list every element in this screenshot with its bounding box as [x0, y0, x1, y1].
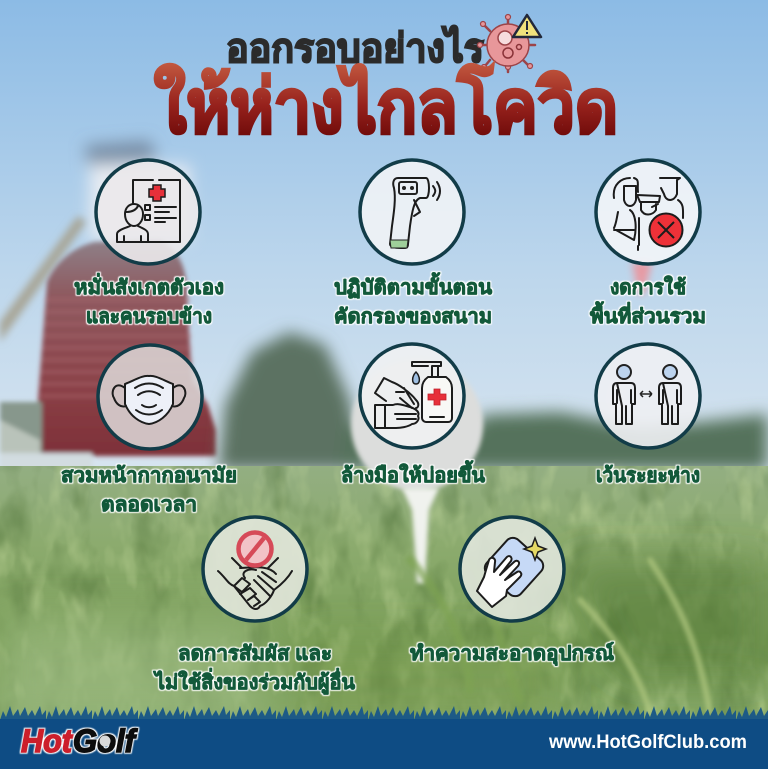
icon: handshake with prohibition sign [203, 517, 307, 621]
icon: hands and sanitizer [360, 344, 464, 448]
title line 2: ให้ห่างไกลโควิด [154, 63, 618, 148]
label: ตลอดเวลา [101, 494, 197, 516]
label: ไม่ใช้สิ่งของร่วมกับผู้อื่น [153, 667, 355, 696]
label [74, 272, 224, 328]
label: ปฏิบัติตามขั้นตอน [334, 272, 492, 299]
icon: medical record person [96, 160, 200, 264]
logo: HotGolf: Hot [21, 723, 73, 759]
item: reduce contact [153, 517, 355, 696]
icon: hand wiping with cloth [460, 517, 564, 621]
logo: HotGolf: Golf [73, 723, 138, 759]
label: สวมหน้ากากอนามัย [61, 464, 237, 487]
label [61, 464, 237, 516]
label: ทำความสะอาดอุปกรณ์ [410, 642, 614, 666]
label: คัดกรองของสนาม [334, 306, 492, 328]
footer bar with grass edge [0, 706, 768, 769]
icon: face mask [98, 345, 202, 449]
item: clean equipment [410, 517, 614, 666]
golf ball and tee [351, 359, 483, 583]
label: พื้นที่ส่วนรวม [590, 301, 706, 328]
label: ล้างมือให้บ่อยขึ้น [341, 460, 485, 487]
icon: thermometer gun [360, 160, 464, 264]
website url: www.HotGolfClub.com [548, 732, 747, 753]
item: wash hands [341, 344, 485, 487]
icon: virus with warning sign [478, 14, 541, 72]
item: wear mask [61, 345, 237, 516]
label: และคนรอบข้าง [86, 305, 212, 328]
label [590, 275, 706, 328]
logo: HotGolf [21, 723, 138, 759]
label: งดการใช้ [610, 275, 686, 299]
item: self monitoring [74, 160, 224, 328]
label [153, 643, 355, 696]
title line 1: ออกรอบอย่างไร [226, 25, 484, 71]
label [334, 272, 492, 328]
label: ลดการสัมผัส และ [178, 643, 332, 665]
item: avoid common areas [590, 160, 706, 328]
icon: two people and arrow [596, 344, 700, 448]
item: follow screening procedure [334, 160, 492, 328]
label: หมั่นสังเกตตัวเอง [74, 272, 224, 299]
item: social distancing [596, 344, 700, 487]
icon: crowd with red cross [596, 160, 700, 264]
label: เว้นระยะห่าง [596, 464, 700, 487]
